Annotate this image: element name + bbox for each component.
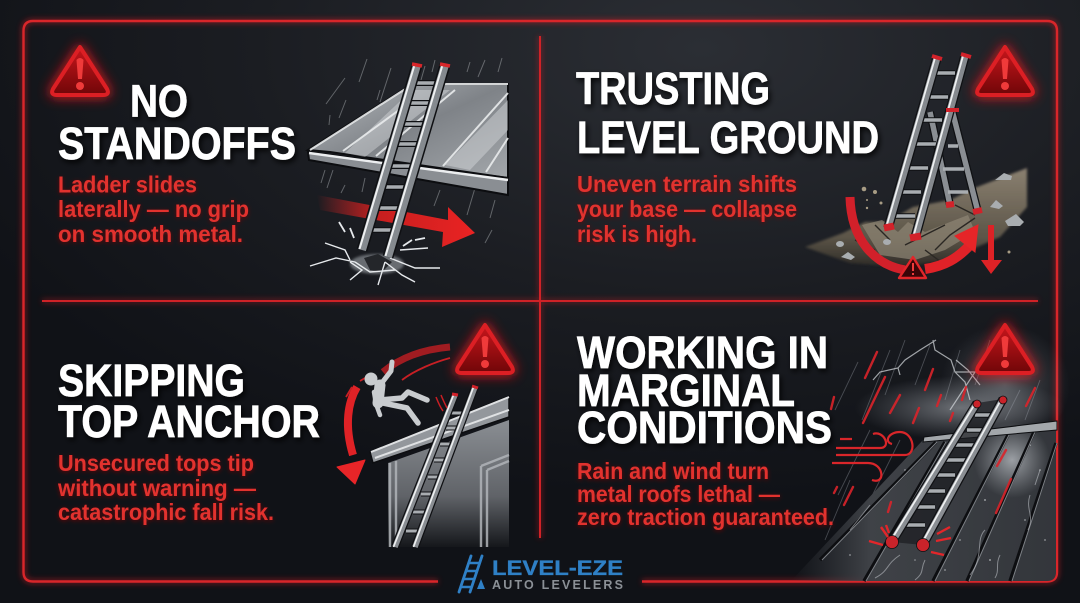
heading: NO — [130, 76, 188, 126]
terrain cracks — [855, 205, 975, 265]
heading: TRUSTING — [576, 63, 770, 114]
roof edge — [370, 396, 509, 463]
description: catastrophic fall risk. — [58, 499, 274, 525]
water streaks — [850, 470, 1040, 580]
panel: trusting level ground — [576, 47, 1033, 278]
soil mounds — [862, 215, 975, 260]
heading: CONDITIONS — [577, 402, 832, 453]
ladder — [890, 399, 1003, 545]
red down arrow — [981, 225, 1002, 274]
illustration: ladder on wet roof in a storm — [791, 325, 1070, 581]
ridge bar — [923, 421, 1057, 442]
ladder front — [884, 54, 971, 238]
icon: warning triangle — [977, 47, 1033, 95]
red slide arrow — [317, 195, 475, 247]
window frame — [390, 455, 509, 547]
description: Unsecured tops tip — [58, 450, 254, 476]
motion arc arrow — [337, 347, 450, 484]
panel: no standoffs — [52, 47, 508, 285]
building wall — [388, 420, 509, 547]
red curved arrow — [850, 197, 978, 270]
impact marks — [869, 525, 951, 555]
back legs — [930, 110, 982, 212]
wordmark: LEVEL-EZE — [492, 557, 623, 580]
heading: STANDOFFS — [58, 118, 296, 169]
roof highlights — [345, 90, 508, 170]
description: metal roofs lethal — — [577, 481, 780, 507]
small warning triangle — [899, 257, 926, 278]
heading: TOP ANCHOR — [58, 396, 320, 447]
wet highlight — [974, 422, 1050, 498]
wind swirls — [832, 432, 912, 481]
roof seams — [310, 84, 508, 172]
illustration: ladder on uneven ground — [805, 54, 1027, 278]
heading — [58, 355, 320, 447]
red rain — [831, 352, 1035, 513]
quadrant dividers — [42, 36, 1038, 538]
panel: working in marginal conditions — [577, 325, 1070, 581]
description: your base — collapse — [577, 196, 797, 222]
icon: blue ladder — [459, 556, 485, 592]
ladder feet and caps — [886, 396, 1007, 552]
heading: LEVEL GROUND — [577, 112, 879, 163]
description: without warning — — [57, 475, 256, 501]
ladder — [360, 64, 450, 257]
roof seams — [820, 432, 1057, 581]
illustration: ladder sliding on metal roof — [308, 58, 508, 285]
ladder — [394, 386, 478, 547]
heading — [576, 63, 879, 163]
description: zero traction guaranteed. — [577, 504, 834, 530]
tagline: AUTO LEVELERS — [492, 578, 623, 592]
grey rain — [825, 340, 1040, 540]
debris — [862, 187, 1010, 254]
heading — [577, 327, 832, 453]
rocks — [836, 173, 1024, 260]
illustration: falling worker and tipping ladder — [337, 347, 509, 547]
roof plane — [308, 84, 508, 178]
roof eave — [308, 152, 508, 195]
heading: SKIPPING — [58, 355, 245, 406]
storm haze — [855, 376, 1065, 440]
icon: warning triangle — [977, 325, 1033, 373]
description: on smooth metal. — [58, 221, 243, 247]
logo: Level-Eze Auto Levelers — [459, 556, 623, 592]
description: Uneven terrain shifts — [577, 171, 797, 197]
description: risk is high. — [577, 221, 697, 247]
heading: MARGINAL — [577, 365, 795, 416]
panel: skipping top anchor — [57, 325, 513, 547]
roof surface — [791, 424, 1056, 581]
terrain — [805, 168, 1027, 267]
description: Rain and wind turn — [577, 458, 769, 484]
falling figure — [364, 362, 427, 423]
description — [577, 171, 797, 247]
icon: warning triangle — [457, 325, 513, 373]
description: laterally — no grip — [58, 196, 249, 222]
description: Ladder slides — [58, 172, 197, 198]
heading — [58, 76, 296, 169]
ground cracks — [310, 222, 440, 285]
heading: WORKING IN — [577, 327, 828, 378]
rain — [321, 58, 502, 243]
description — [58, 172, 249, 247]
lightning — [873, 340, 980, 410]
wet speckle — [849, 444, 1046, 571]
description — [57, 450, 274, 525]
icon: warning triangle — [52, 47, 108, 95]
description — [577, 458, 834, 530]
